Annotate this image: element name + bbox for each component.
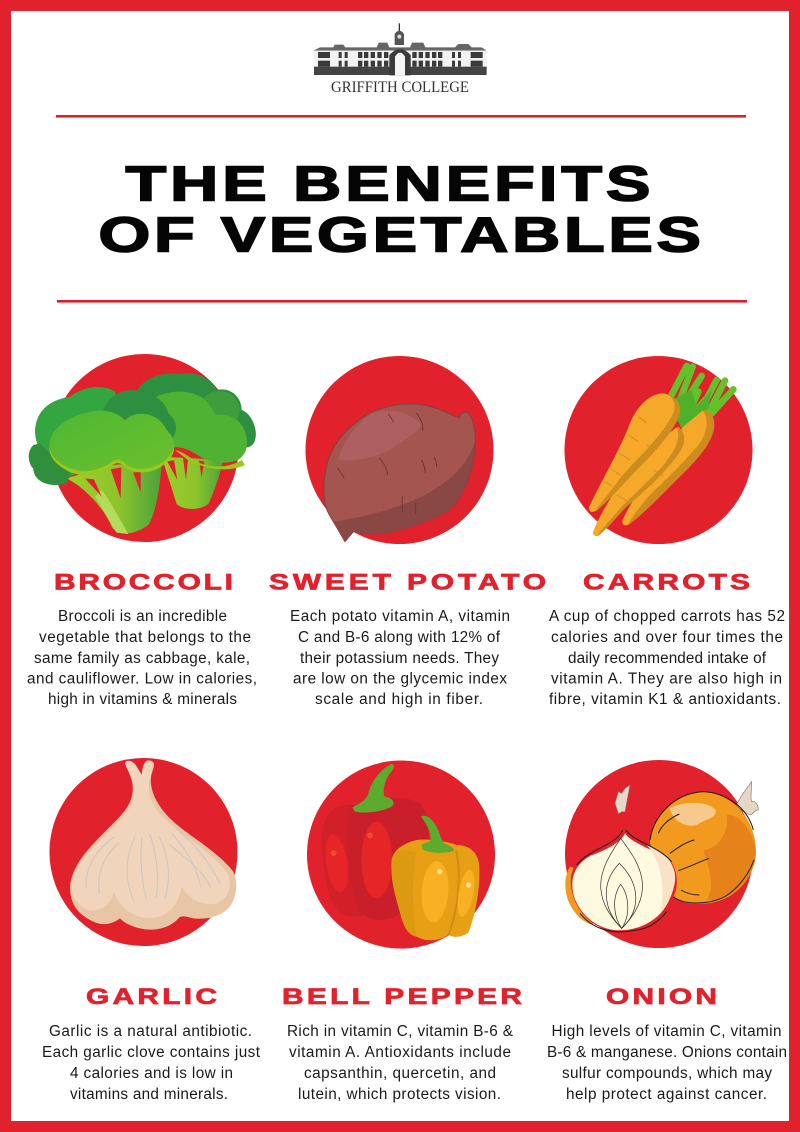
heading: GARLIC [86, 984, 217, 1009]
description: and cauliflower. Low in calories, [27, 670, 257, 688]
logo wordmark: GRIFFITH COLLEGE [331, 79, 469, 96]
logo: Griffith College [313, 23, 487, 96]
title [98, 157, 701, 262]
panel: garlic [42, 758, 261, 1103]
panel: broccoli [27, 354, 257, 708]
description: help protect against cancer. [566, 1086, 767, 1103]
icon: broccoli [29, 354, 256, 542]
title: OF VEGETABLES [98, 208, 701, 262]
description: sulfur compounds, which may [562, 1065, 772, 1082]
heading: ONION [606, 984, 717, 1009]
description: vitamin A. Antioxidants include [289, 1044, 511, 1061]
description: capsanthin, quercetin, and [304, 1065, 496, 1082]
heading: CARROTS [583, 569, 750, 595]
icon: onions [565, 760, 758, 948]
description: are low on the glycemic index [293, 670, 507, 688]
description: lutein, which protects vision. [298, 1086, 501, 1103]
description: scale and high in fiber. [315, 691, 483, 708]
bottom divider [57, 300, 747, 303]
description [42, 1023, 261, 1103]
description: vitamins and minerals. [70, 1086, 228, 1103]
description: Rich in vitamin C, vitamin B-6 & [287, 1023, 513, 1040]
description: daily recommended intake of [568, 650, 767, 667]
icon: bell peppers [307, 760, 495, 948]
description [290, 608, 510, 708]
heading: BELL PEPPER [282, 984, 522, 1009]
description: Each garlic clove contains just [42, 1044, 261, 1061]
description [547, 1023, 787, 1103]
title: THE BENEFITS [126, 157, 650, 211]
panel: carrots [549, 356, 785, 708]
description: vitamin A. They are also high in [551, 670, 782, 688]
description [27, 608, 257, 708]
icon: sweet potato [306, 356, 494, 544]
description: A cup of chopped carrots has 52 [549, 608, 785, 625]
description: their potassium needs. They [300, 650, 499, 667]
icon: carrots [564, 356, 752, 544]
panel: sweet potato [269, 356, 546, 708]
description: 4 calories and is low in [70, 1065, 233, 1082]
heading: SWEET POTATO [269, 569, 546, 595]
icon: garlic [50, 758, 238, 946]
description [549, 608, 785, 708]
description: same family as cabbage, kale, [34, 650, 250, 667]
description: Each potato vitamin A, vitamin [290, 608, 510, 625]
description: B-6 & manganese. Onions contain [547, 1044, 787, 1061]
description: high in vitamins & minerals [48, 691, 237, 708]
heading: BROCCOLI [54, 569, 233, 595]
description [287, 1023, 513, 1103]
description: vegetable that belongs to the [39, 629, 251, 646]
description: C and B-6 along with 12% of [298, 629, 501, 646]
panel: onion [547, 760, 787, 1103]
panel: bell pepper [282, 760, 522, 1103]
description: calories and over four times the [551, 629, 783, 646]
description: Garlic is a natural antibiotic. [49, 1023, 252, 1040]
description: fibre, vitamin K1 & antioxidants. [549, 691, 781, 708]
description: High levels of vitamin C, vitamin [552, 1023, 782, 1040]
top divider [56, 115, 746, 118]
description: Broccoli is an incredible [58, 608, 227, 625]
icon: college building [313, 23, 487, 75]
